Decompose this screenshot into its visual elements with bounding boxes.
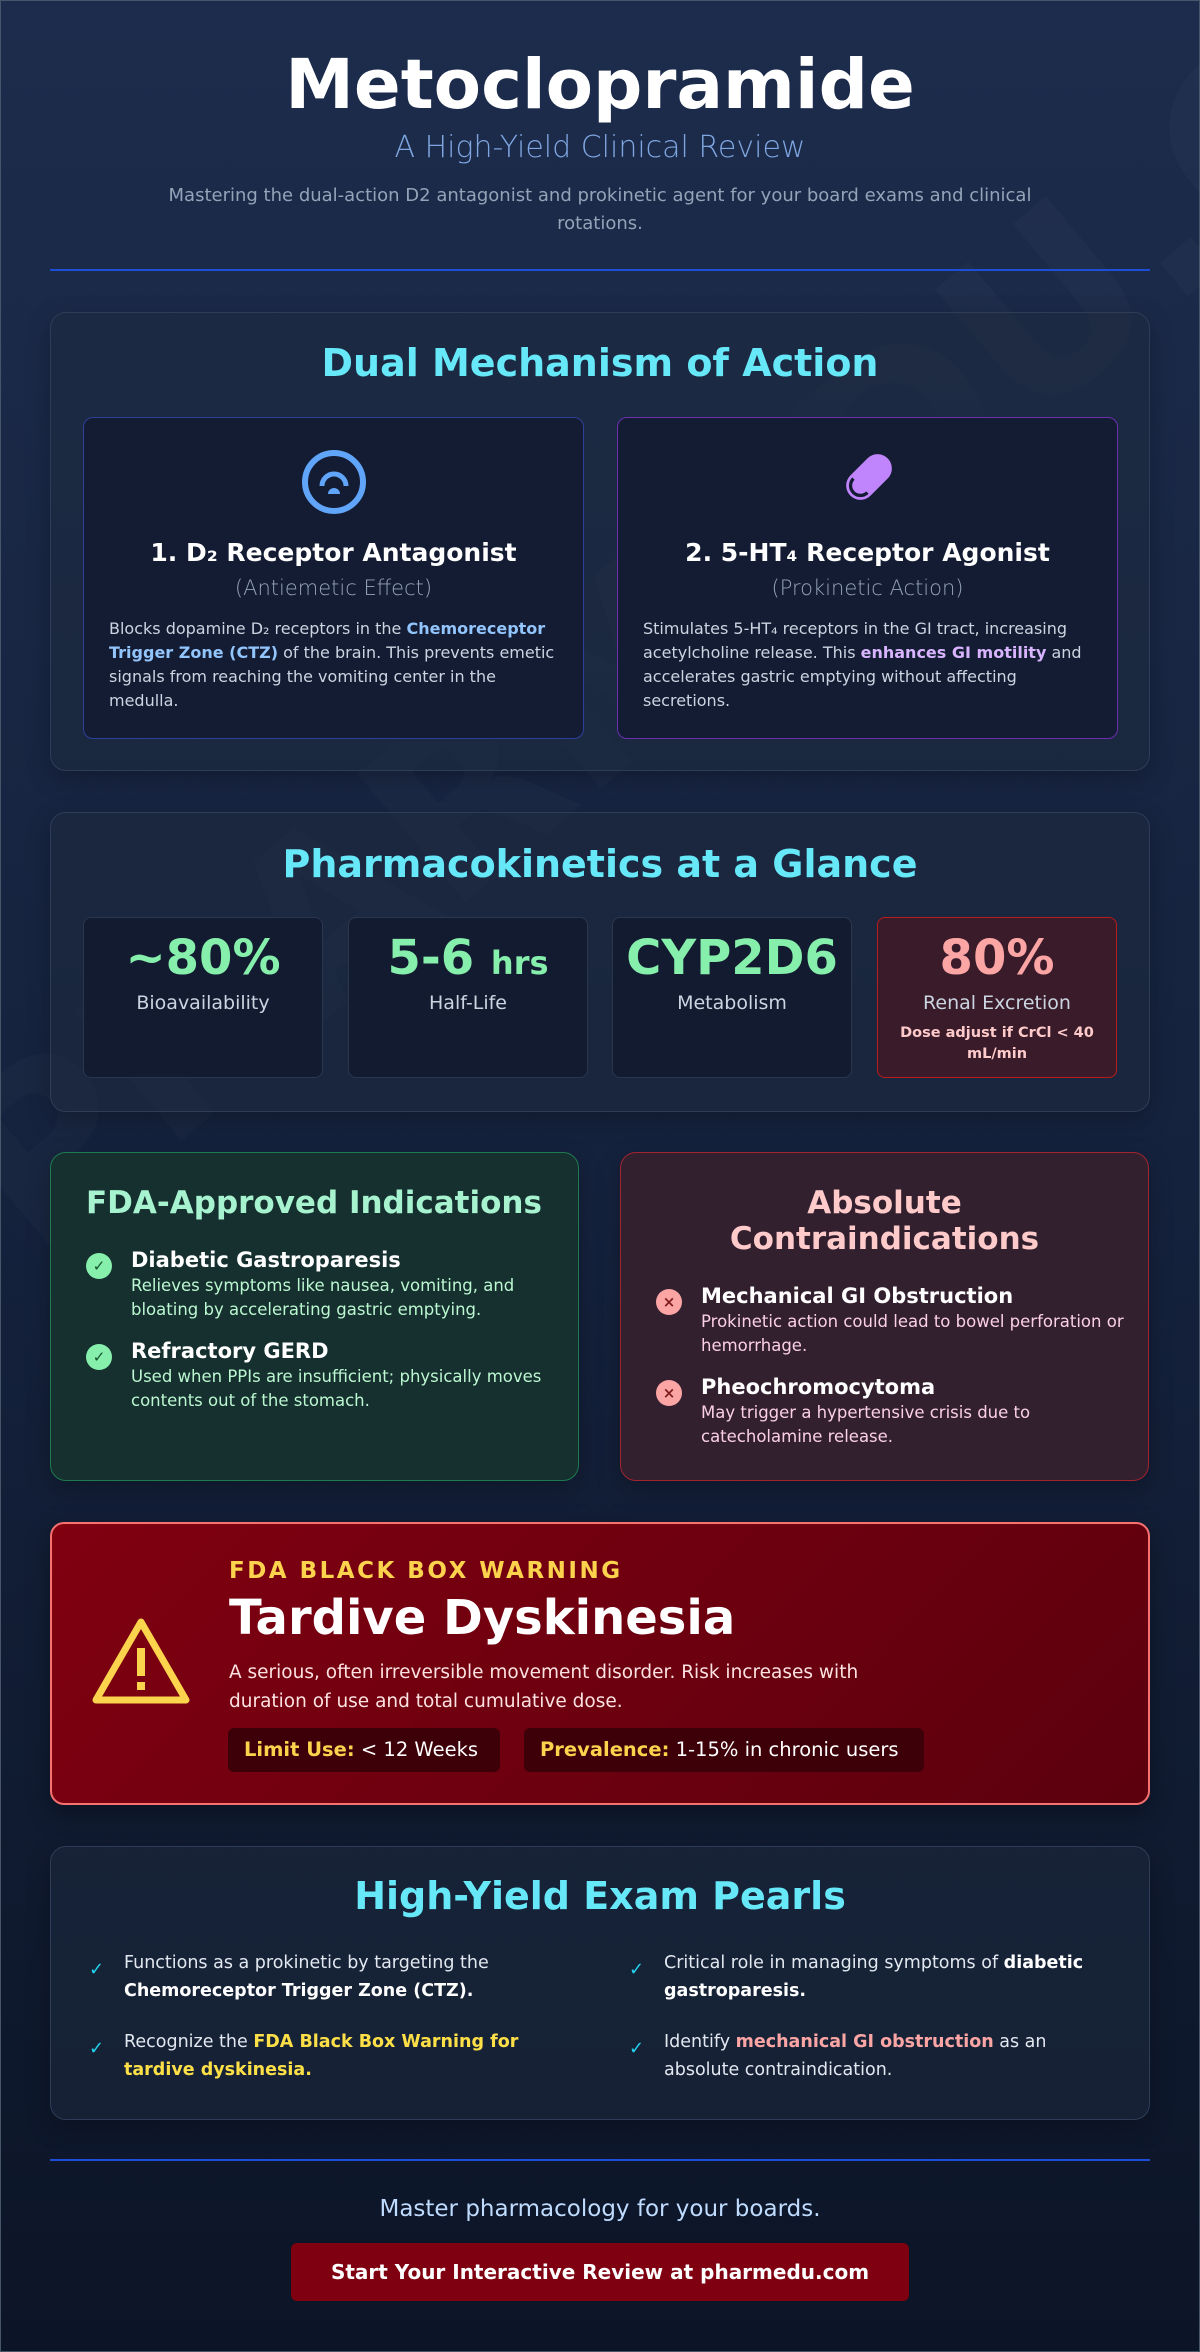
card: 5-HT4 agonist: 2. 5-HT₄ Receptor Agonist [685, 538, 1050, 567]
card: D2 antagonist: (Antiemetic Effect) [235, 576, 432, 600]
warning text: A serious, often irreversible movement disorder. Risk increases with duration of use and total cumulative dose. [229, 1662, 858, 1712]
pearl 2: Critical role in managing symptoms of diabetic gastroparesis. [664, 1953, 1083, 2001]
stat: renal excretion [877, 917, 1117, 1078]
heading: indications: FDA-Approved Indications [86, 1185, 542, 1221]
card: D2 antagonist: 1. D₂ Receptor Antagonist [150, 538, 517, 567]
card: 5-HT4 agonist: (Prokinetic Action) [772, 576, 963, 600]
icon: warning triangle [92, 1618, 190, 1704]
subtitle: A High-Yield Clinical Review [395, 130, 805, 165]
item: refractory GERD: Refractory GERD [131, 1339, 329, 1363]
panel: exam pearls [50, 1846, 1150, 2120]
heading: contraindications: Absolute [807, 1185, 962, 1221]
stat: half-life: Half-Life [429, 992, 507, 1014]
stat: renal excretion: Renal Excretion [923, 992, 1071, 1014]
pearl 4: Identify mechanical GI obstruction as an absolute contraindication. [664, 2032, 1047, 2080]
heading: contraindications [730, 1185, 1039, 1257]
card: D2 antagonist: Blocks dopamine D₂ receptors in the Chemoreceptor Trigger Zone (CTZ) of the brain. This prevents emetic signals from reaching the vomiting center in the medulla. [109, 619, 554, 710]
heading: contraindications: Contraindications [730, 1221, 1039, 1257]
pearl 3: Recognize the FDA Black Box Warning for tardive dyskinesia. [124, 2032, 518, 2080]
pearl 2: ✓ [629, 1959, 644, 1980]
pearl 1: Functions as a prokinetic by targeting the Chemoreceptor Trigger Zone (CTZ). [124, 1953, 489, 2001]
icon: face [302, 450, 366, 514]
stat: renal excretion: Dose adjust if CrCl < 40 mL/min [900, 1025, 1094, 1062]
pearl 1: ✓ [89, 1959, 104, 1980]
pill: prevalence: Prevalence: 1-15% in chronic users [540, 1738, 899, 1761]
stat: bioavailability [83, 917, 323, 1078]
item: diabetic gastroparesis: Diabetic Gastroparesis [131, 1248, 401, 1272]
card: D2 antagonist [83, 417, 584, 739]
item: mechanical GI obstruction [656, 1284, 1124, 1355]
heading: pearls: High-Yield Exam Pearls [354, 1874, 846, 1918]
title: Metoclopramide [285, 45, 915, 125]
item: diabetic gastroparesis: Relieves symptoms like nausea, vomiting, and bloating by accelerating gastric emptying. [131, 1276, 514, 1319]
item: refractory GERD: ✓ [93, 1348, 105, 1366]
stat: half-life: 5-6 hrs [387, 930, 549, 986]
intro text: Mastering the dual-action D2 antagonist and prokinetic agent for your board exams and clinical rotations. [169, 185, 1031, 234]
icon: pill [846, 454, 892, 500]
label: FDA black box warning: FDA BLACK BOX WARNING [229, 1558, 623, 1584]
item: diabetic gastroparesis [86, 1248, 514, 1319]
stat: metabolism: Metabolism [677, 992, 787, 1014]
item: pheochromocytoma: May trigger a hypertensive crisis due to catecholamine release. [701, 1403, 1030, 1446]
card: 5-HT4 agonist [617, 417, 1118, 739]
stat: bioavailability: Bioavailability [136, 992, 270, 1014]
panel: pharmacokinetics [50, 812, 1150, 1112]
stat: half-life [348, 917, 588, 1078]
item: pheochromocytoma: Pheochromocytoma [701, 1375, 935, 1399]
heading: mechanism: Dual Mechanism of Action [322, 341, 878, 385]
pearl 3: ✓ [89, 2038, 104, 2059]
stat: renal excretion: 80% [940, 930, 1054, 986]
item: mechanical GI obstruction: Prokinetic action could lead to bowel perforation or hemorrhage. [701, 1312, 1124, 1355]
panel: mechanism of action [50, 312, 1150, 771]
button: CTA [291, 2243, 909, 2301]
item: pheochromocytoma [656, 1375, 1030, 1446]
item: diabetic gastroparesis: ✓ [93, 1257, 105, 1275]
item: refractory GERD: Used when PPIs are insufficient; physically moves contents out of the stomach. [131, 1367, 541, 1410]
footer text: Master pharmacology for your boards. [379, 2196, 821, 2222]
stat: bioavailability: ~80% [125, 930, 281, 986]
pearl 4: ✓ [629, 2038, 644, 2059]
pill: prevalence [524, 1728, 924, 1772]
heading: pharmacokinetics: Pharmacokinetics at a Glance [283, 842, 917, 886]
card: 5-HT4 agonist: Stimulates 5-HT₄ receptors in the GI tract, increasing acetylcholine release. This enhances GI motility and accelerates gastric emptying without affecting secretions. [643, 619, 1082, 710]
panel: indications [50, 1152, 579, 1481]
stat: metabolism: CYP2D6 [626, 930, 838, 986]
pill: limit use: Limit Use: < 12 Weeks [244, 1738, 478, 1761]
item: mechanical GI obstruction: × [663, 1293, 675, 1311]
item: refractory GERD [86, 1339, 541, 1410]
pill: limit use [228, 1728, 500, 1772]
button: CTA: Start Your Interactive Review at pharmedu.com [331, 2260, 869, 2284]
heading: tardive dyskinesia: Tardive Dyskinesia [229, 1590, 735, 1646]
panel: black box warning [50, 1522, 1150, 1805]
panel: contraindications [620, 1152, 1149, 1481]
item: pheochromocytoma: × [663, 1384, 675, 1402]
stat: metabolism [612, 917, 852, 1078]
item: mechanical GI obstruction: Mechanical GI Obstruction [701, 1284, 1013, 1308]
